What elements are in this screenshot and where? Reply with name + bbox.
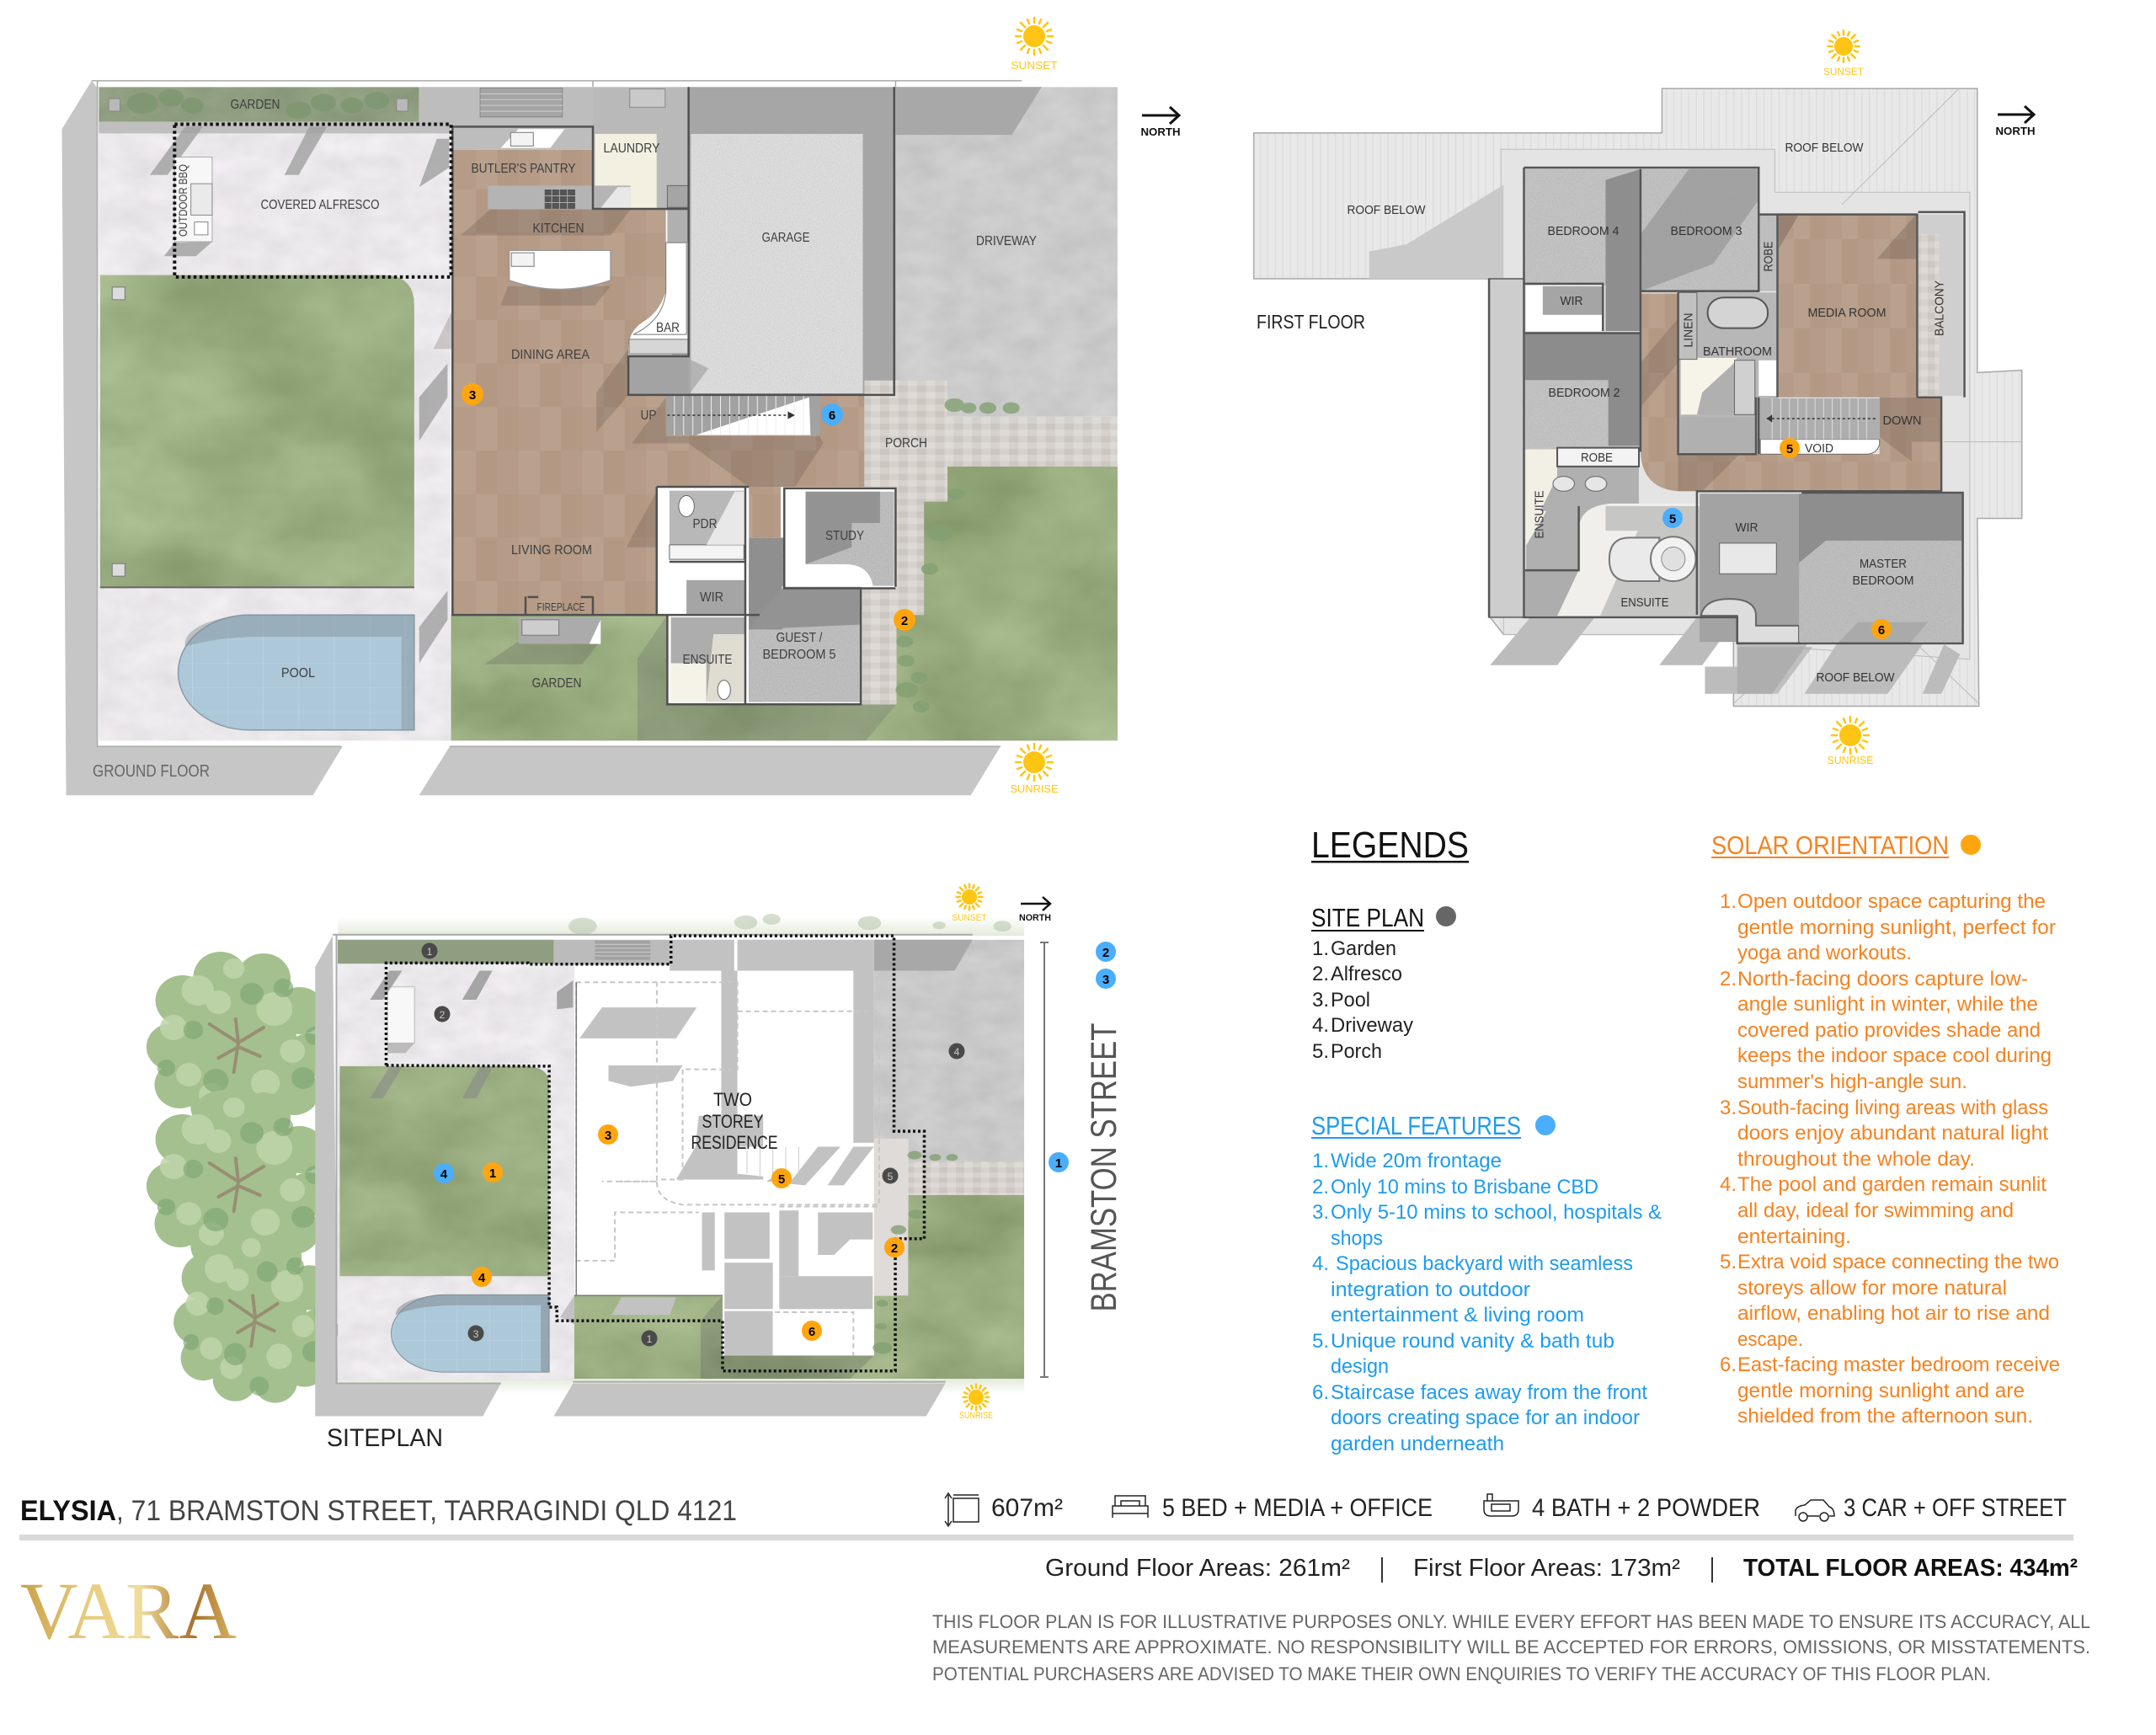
lawn <box>100 275 414 587</box>
list: solar orientation: keeps the indoor space cool during <box>1737 1044 2052 1067</box>
label: sunrise: SUNRISE <box>1011 782 1059 795</box>
footer: floor areas: Ground Floor Areas: 261m² <box>1045 1555 1350 1582</box>
study <box>784 489 895 587</box>
panel: first floor plan <box>1254 30 2035 766</box>
room labels: ground floor <box>176 98 1037 691</box>
logo: VARA: VARA <box>20 1566 237 1656</box>
list: solar orientation: 2. <box>1720 968 1737 990</box>
heading: site plan legend: SITE PLAN <box>1311 903 1424 932</box>
house footprint <box>576 940 908 1355</box>
list: solar orientation: yoga and workouts. <box>1737 942 1912 964</box>
list: solar orientation: airflow, enabling hot air to rise and <box>1737 1302 2050 1325</box>
disclaimer <box>932 1611 2090 1684</box>
bedroom 4 WIR <box>1526 286 1603 331</box>
list: site plan: Porch <box>1331 1040 1382 1063</box>
list: solar orientation: North-facing doors capture low- <box>1737 968 2028 990</box>
bedroom 4 <box>1525 169 1641 331</box>
room labels: ground floor: LIVING ROOM <box>511 543 592 558</box>
room labels: first floor: MEDIA ROOM <box>1807 306 1886 320</box>
room labels: ground floor: WIR <box>700 590 723 605</box>
room labels: ground floor: POOL <box>281 666 315 681</box>
label: sunset: SUNSET <box>1823 66 1865 77</box>
markers: site plan dark: 5 <box>888 1171 894 1182</box>
marble paving <box>99 122 451 740</box>
room labels: ground floor: OUTDOOR BBQ <box>176 164 189 237</box>
paver path <box>947 417 1118 467</box>
ground ensuite <box>671 617 745 702</box>
markers: site plan solar: 5 <box>778 1172 785 1187</box>
footer: property stats: 4 BATH + 2 POWDER <box>1532 1494 1760 1522</box>
footer: property title: ELYSIA <box>20 1495 116 1527</box>
markers: site plan dark: 1 <box>427 946 433 958</box>
list: special features: shops <box>1331 1227 1383 1250</box>
list: site plan: 3. <box>1312 989 1329 1012</box>
list: solar orientation: 3. <box>1720 1097 1737 1119</box>
top garden strip <box>99 87 593 133</box>
markers: site plan features: 4 <box>440 1167 448 1182</box>
robe <box>1758 215 1778 291</box>
label: two storey residence: TWO <box>713 1089 752 1110</box>
master bedroom <box>1799 494 1963 644</box>
porch pavers <box>862 381 947 704</box>
list: solar orientation: summer's high-angle sun. <box>1737 1070 1967 1093</box>
list: special features: entertainment & living room <box>1331 1304 1584 1327</box>
heading: ground floor: GROUND FLOOR <box>93 762 210 781</box>
list: solar orientation: throughout the whole day. <box>1737 1148 1975 1171</box>
list: site plan: 4. <box>1312 1014 1329 1037</box>
stairs <box>738 1146 818 1179</box>
markers: site plan solar <box>472 1124 905 1341</box>
label: north: NORTH <box>1996 125 2035 137</box>
lawn <box>339 1066 549 1276</box>
room labels: ground floor: BEDROOM 5 <box>763 648 836 662</box>
list: special features: Only 10 mins to Brisbane CBD <box>1331 1176 1598 1198</box>
markers: ground floor: 6 <box>829 408 835 423</box>
icon: north arrow <box>1142 107 1179 124</box>
markers: ground floor <box>462 383 915 631</box>
markers: first floor: 5 <box>1786 442 1793 456</box>
dotted boundary: first floor <box>386 936 924 1371</box>
room labels: first floor: DOWN <box>1883 414 1922 428</box>
first floor dashed outline <box>576 982 879 1355</box>
room labels: ground floor: PDR <box>692 517 718 531</box>
room labels: first floor: BEDROOM 4 <box>1548 224 1619 238</box>
list: special features: 2. <box>1312 1176 1329 1198</box>
icon: sunrise <box>1016 744 1053 781</box>
label: sunrise: SUNRISE <box>959 1411 993 1421</box>
list: special features: 5. <box>1312 1330 1329 1353</box>
list: solar orientation: entertaining. <box>1737 1225 1851 1248</box>
list: solar orientation: 1. <box>1720 890 1737 913</box>
room labels: first floor: BEDROOM <box>1853 574 1913 588</box>
stairs <box>666 396 819 435</box>
bushes <box>895 398 1020 713</box>
icon: car <box>1796 1500 1834 1521</box>
list: solar orientation: escape. <box>1737 1328 1803 1351</box>
walk-in robe <box>670 563 745 614</box>
lawn east and south <box>451 467 1118 740</box>
footer: property stats: 3 CAR + OFF STREET <box>1844 1494 2067 1522</box>
site shadow <box>315 936 946 1417</box>
markers: first floor <box>1662 438 1892 639</box>
bushes <box>873 1150 958 1353</box>
label: sunset: SUNSET <box>952 913 987 923</box>
list: solar orientation: storeys allow for more natural <box>1737 1277 2007 1300</box>
markers: ground floor: 2 <box>901 614 908 628</box>
floor shadows <box>434 210 824 547</box>
heading: siteplan: SITEPLAN <box>327 1424 443 1452</box>
room labels: ground floor: PORCH <box>885 436 927 451</box>
list: special features: Staircase faces away from the front <box>1331 1381 1647 1404</box>
list: special features: integration to outdoor <box>1331 1279 1530 1301</box>
list: special features: 4. <box>1312 1252 1329 1275</box>
icon: sunset <box>957 884 982 910</box>
label: two storey residence: STOREY <box>702 1111 764 1132</box>
first floor ensuite 1 <box>1526 448 1639 570</box>
icon: sunrise <box>1832 717 1869 754</box>
heading: solar orientation: SOLAR ORIENTATION <box>1711 830 1949 860</box>
dimension line <box>1040 942 1049 1377</box>
room labels: ground floor: GARDEN <box>231 98 280 112</box>
heading: special features: SPECIAL FEATURES <box>1311 1111 1521 1140</box>
icon: north arrow <box>1998 106 2034 123</box>
driveway <box>894 87 1118 417</box>
master WIR <box>1700 494 1799 643</box>
footer: property stats: 5 BED + MEDIA + OFFICE <box>1162 1494 1433 1522</box>
markers: site plan dark: 3 <box>473 1328 479 1340</box>
label: north: NORTH <box>1140 125 1181 138</box>
marble paving <box>338 964 574 1380</box>
divider bar <box>19 1535 2073 1540</box>
room labels: ground floor: DRIVEWAY <box>976 234 1037 248</box>
markers: ground floor: 3 <box>469 388 476 403</box>
pool <box>392 1295 549 1372</box>
markers: site plan features: 3 <box>1102 973 1109 987</box>
house shadow on lawn <box>638 615 896 740</box>
guest bedroom <box>749 537 861 702</box>
room labels: ground floor: GUEST / <box>776 631 823 645</box>
list: site plan: 5. <box>1312 1040 1329 1063</box>
room labels: ground floor: COVERED ALFRESCO <box>261 198 379 212</box>
list: solar orientation: gentle morning sunlight, perfect for <box>1737 916 2056 939</box>
powder room <box>670 491 744 559</box>
list: special features: Wide 20m frontage <box>1331 1150 1502 1172</box>
disclaimer: THIS FLOOR PLAN IS FOR ILLUSTRATIVE PURPOSES ONLY. WHILE EVERY EFFORT HAS BEEN MADE TO ENSURE ITS ACCURACY, ALL <box>932 1611 2090 1632</box>
fireplace <box>519 617 600 644</box>
list: solar orientation: South-facing living areas with glass <box>1737 1097 2048 1119</box>
list: special features: Spacious backyard with seamless <box>1336 1252 1633 1275</box>
void <box>1760 440 1880 454</box>
markers: site plan dark <box>421 943 965 1346</box>
media room <box>1779 215 1916 398</box>
label: two storey residence: RESIDENCE <box>691 1132 778 1153</box>
lines: house edge <box>574 982 723 1295</box>
room labels: ground floor: UP <box>640 408 657 423</box>
icon: land area <box>945 1493 979 1526</box>
markers: site plan solar: 3 <box>605 1129 611 1143</box>
list: solar orientation: angle sunlight in winter, while the <box>1737 993 2038 1016</box>
room labels: ground floor: ENSUITE <box>682 653 733 667</box>
garage <box>628 87 895 395</box>
list: site plan: Alfresco <box>1331 963 1402 985</box>
list: site plan: 1. <box>1312 937 1329 960</box>
house roof shadow shapes <box>560 940 874 1355</box>
room labels: first floor: ROOF BELOW <box>1816 670 1895 685</box>
room labels: first floor: LINEN <box>1681 313 1696 347</box>
alfresco BBQ and shadows <box>370 971 573 1053</box>
hall timber floor <box>1641 294 1941 491</box>
list: solar orientation: 6. <box>1720 1353 1737 1376</box>
room labels: first floor: WIR <box>1560 294 1583 308</box>
walls <box>452 87 895 704</box>
list: solar orientation: shielded from the afternoon sun. <box>1737 1405 2033 1428</box>
icon: north arrow <box>1021 897 1050 910</box>
room labels: ground floor: BAR <box>656 321 680 335</box>
list: special features: 6. <box>1312 1381 1329 1404</box>
label: north: NORTH <box>1019 913 1051 923</box>
trees <box>147 952 339 1403</box>
list: solar orientation: The pool and garden remain sunlit <box>1737 1173 2047 1196</box>
room labels: first floor: BEDROOM 2 <box>1548 386 1620 400</box>
lawn south and east <box>574 1195 1024 1379</box>
list: solar orientation: all day, ideal for swimming and <box>1737 1199 2014 1222</box>
paver path <box>908 1161 1024 1195</box>
room labels: ground floor: DINING AREA <box>511 348 590 362</box>
room labels: first floor: ENSUITE <box>1620 595 1669 610</box>
room labels: first floor: ROOF BELOW <box>1348 203 1426 217</box>
list: site plan: Driveway <box>1331 1014 1413 1037</box>
markers: site plan dark: 4 <box>954 1046 960 1058</box>
master ensuite <box>1525 504 1700 616</box>
room labels: first floor: BEDROOM 3 <box>1671 224 1742 238</box>
room labels: ground floor: FIREPLACE <box>537 601 585 613</box>
markers: site plan features: 1 <box>1055 1156 1062 1171</box>
room labels: first floor: ROBE <box>1581 451 1613 465</box>
list: special features: 1. <box>1312 1150 1329 1172</box>
list: site plan: Garden <box>1331 937 1396 960</box>
list: solar orientation <box>1720 890 2060 1428</box>
label: sunset: SUNSET <box>1011 59 1058 72</box>
icon: bed <box>1113 1496 1148 1518</box>
heading: legends: LEGENDS <box>1311 825 1469 866</box>
list: solar orientation: 5. <box>1720 1251 1737 1273</box>
cast shadow of site <box>61 81 1001 795</box>
disclaimer: MEASUREMENTS ARE APPROXIMATE. NO RESPONSIBILITY WILL BE ACCEPTED FOR ERRORS, OMISSIONS, OR MISSTATEMENTS. <box>932 1636 2090 1658</box>
footer: property title: , 71 BRAMSTON STREET, TARRAGINDI QLD 4121 <box>116 1495 737 1527</box>
markers: site plan dark: 2 <box>440 1009 446 1021</box>
label: sunrise: SUNRISE <box>1828 754 1874 766</box>
list: solar orientation: covered patio provides shade and <box>1737 1019 2041 1042</box>
room labels: first floor: VOID <box>1805 441 1833 456</box>
alfresco post shadows <box>150 126 449 664</box>
icon: sunset <box>1828 30 1860 62</box>
footer: property stats <box>945 1493 2067 1526</box>
markers: site plan features: 2 <box>1102 946 1109 960</box>
room labels: first floor: BATHROOM <box>1703 344 1772 359</box>
balcony <box>1919 215 1963 396</box>
list: site plan: Pool <box>1331 989 1370 1012</box>
list: special features: design <box>1331 1355 1389 1378</box>
room labels: first floor: ENSUITE <box>1533 490 1546 539</box>
markers: first floor: 6 <box>1878 623 1885 638</box>
outdoor BBQ bench <box>174 157 212 242</box>
dotted boundary: covered alfresco <box>174 124 451 277</box>
markers: first floor: 5 <box>1669 512 1676 526</box>
kitchen island <box>510 250 611 290</box>
pool <box>179 615 414 730</box>
driveway <box>874 940 1024 1161</box>
list: special features: Only 5-10 mins to school, hospitals & <box>1331 1201 1662 1224</box>
room labels: ground floor: KITCHEN <box>532 222 584 236</box>
markers: site plan solar: 4 <box>478 1271 486 1285</box>
panel: site plan <box>147 884 1124 1452</box>
room labels: first floor <box>1348 141 1947 685</box>
list: special features: Unique round vanity & bath tub <box>1331 1330 1614 1353</box>
panel: legends <box>1311 825 2060 1455</box>
list: solar orientation: 4. <box>1720 1173 1737 1196</box>
butler's pantry bench <box>452 126 593 150</box>
cast shadows <box>1369 184 1960 694</box>
list: solar orientation: Open outdoor space capturing the <box>1737 890 2046 913</box>
markers: site plan dark: 1 <box>647 1333 653 1345</box>
bedroom 2 <box>1525 333 1641 449</box>
laundry <box>593 87 689 243</box>
porch pavers <box>874 1139 908 1295</box>
room labels: ground floor: GARAGE <box>761 231 810 245</box>
bedroom 3 <box>1641 169 1758 292</box>
footer: floor areas: TOTAL FLOOR AREAS: 434m² <box>1743 1555 2078 1582</box>
list: special features: garden underneath <box>1331 1433 1504 1455</box>
list: solar orientation: Extra void space connecting the two <box>1737 1251 2059 1273</box>
list: solar orientation: gentle morning sunlight and are <box>1737 1380 2025 1402</box>
roofs below <box>1254 88 2022 706</box>
list: solar orientation: doors enjoy abundant natural light <box>1737 1122 2048 1145</box>
list: site plan <box>1312 937 1413 1063</box>
footer: floor areas <box>1045 1555 2078 1583</box>
room labels: first floor: BALCONY <box>1932 280 1947 336</box>
markers: site plan solar: 6 <box>808 1325 815 1339</box>
vegetation strips <box>338 916 1024 936</box>
footer: floor areas: First Floor Areas: 173m² <box>1413 1555 1680 1582</box>
top garden strip <box>338 940 671 965</box>
markers: site plan solar: 2 <box>891 1241 898 1256</box>
bathroom <box>1678 292 1778 453</box>
room labels: ground floor: BUTLER'S PANTRY <box>472 162 576 176</box>
room labels: ground floor: LAUNDRY <box>603 141 660 156</box>
room labels: first floor: ROOF BELOW <box>1785 141 1864 155</box>
west walkway <box>1489 279 1524 617</box>
room labels: first floor: MASTER <box>1860 557 1907 571</box>
heading: first floor: FIRST FLOOR <box>1257 311 1365 333</box>
footer: property stats: 607m² <box>991 1494 1063 1522</box>
markers: site plan features <box>434 942 1116 1183</box>
room labels: ground floor: GARDEN <box>532 676 581 691</box>
disclaimer: POTENTIAL PURCHASERS ARE ADVISED TO MAKE THEIR OWN ENQUIRIES TO VERIFY THE ACCURACY OF THIS FLOOR PLAN. <box>932 1663 1991 1684</box>
bar counter <box>633 243 686 334</box>
stairs <box>1760 398 1880 440</box>
list: site plan: 2. <box>1312 963 1329 985</box>
room labels: first floor: ROBE <box>1762 241 1775 271</box>
label: Bramston Street: BRAMSTON STREET <box>1084 1022 1124 1312</box>
bottom roof shadow <box>1737 647 1812 694</box>
icon: sunrise <box>963 1385 989 1410</box>
walls <box>1489 168 1965 643</box>
icon: sunset <box>1016 18 1053 55</box>
list: special features: doors creating space for an indoor <box>1331 1407 1640 1429</box>
icon: bath <box>1484 1494 1518 1516</box>
list: special features <box>1312 1150 1662 1455</box>
room labels: ground floor: STUDY <box>825 529 864 543</box>
kitchen bench and cooktop <box>488 185 631 209</box>
list: special features: 3. <box>1312 1201 1329 1224</box>
label: two storey residence <box>691 1089 778 1153</box>
list: solar orientation: East-facing master bedroom receive <box>1737 1353 2060 1376</box>
markers: site plan solar: 1 <box>489 1166 496 1181</box>
timber floor <box>452 150 864 614</box>
room labels: first floor: WIR <box>1735 520 1758 535</box>
panel: ground floor plan <box>61 18 1181 795</box>
